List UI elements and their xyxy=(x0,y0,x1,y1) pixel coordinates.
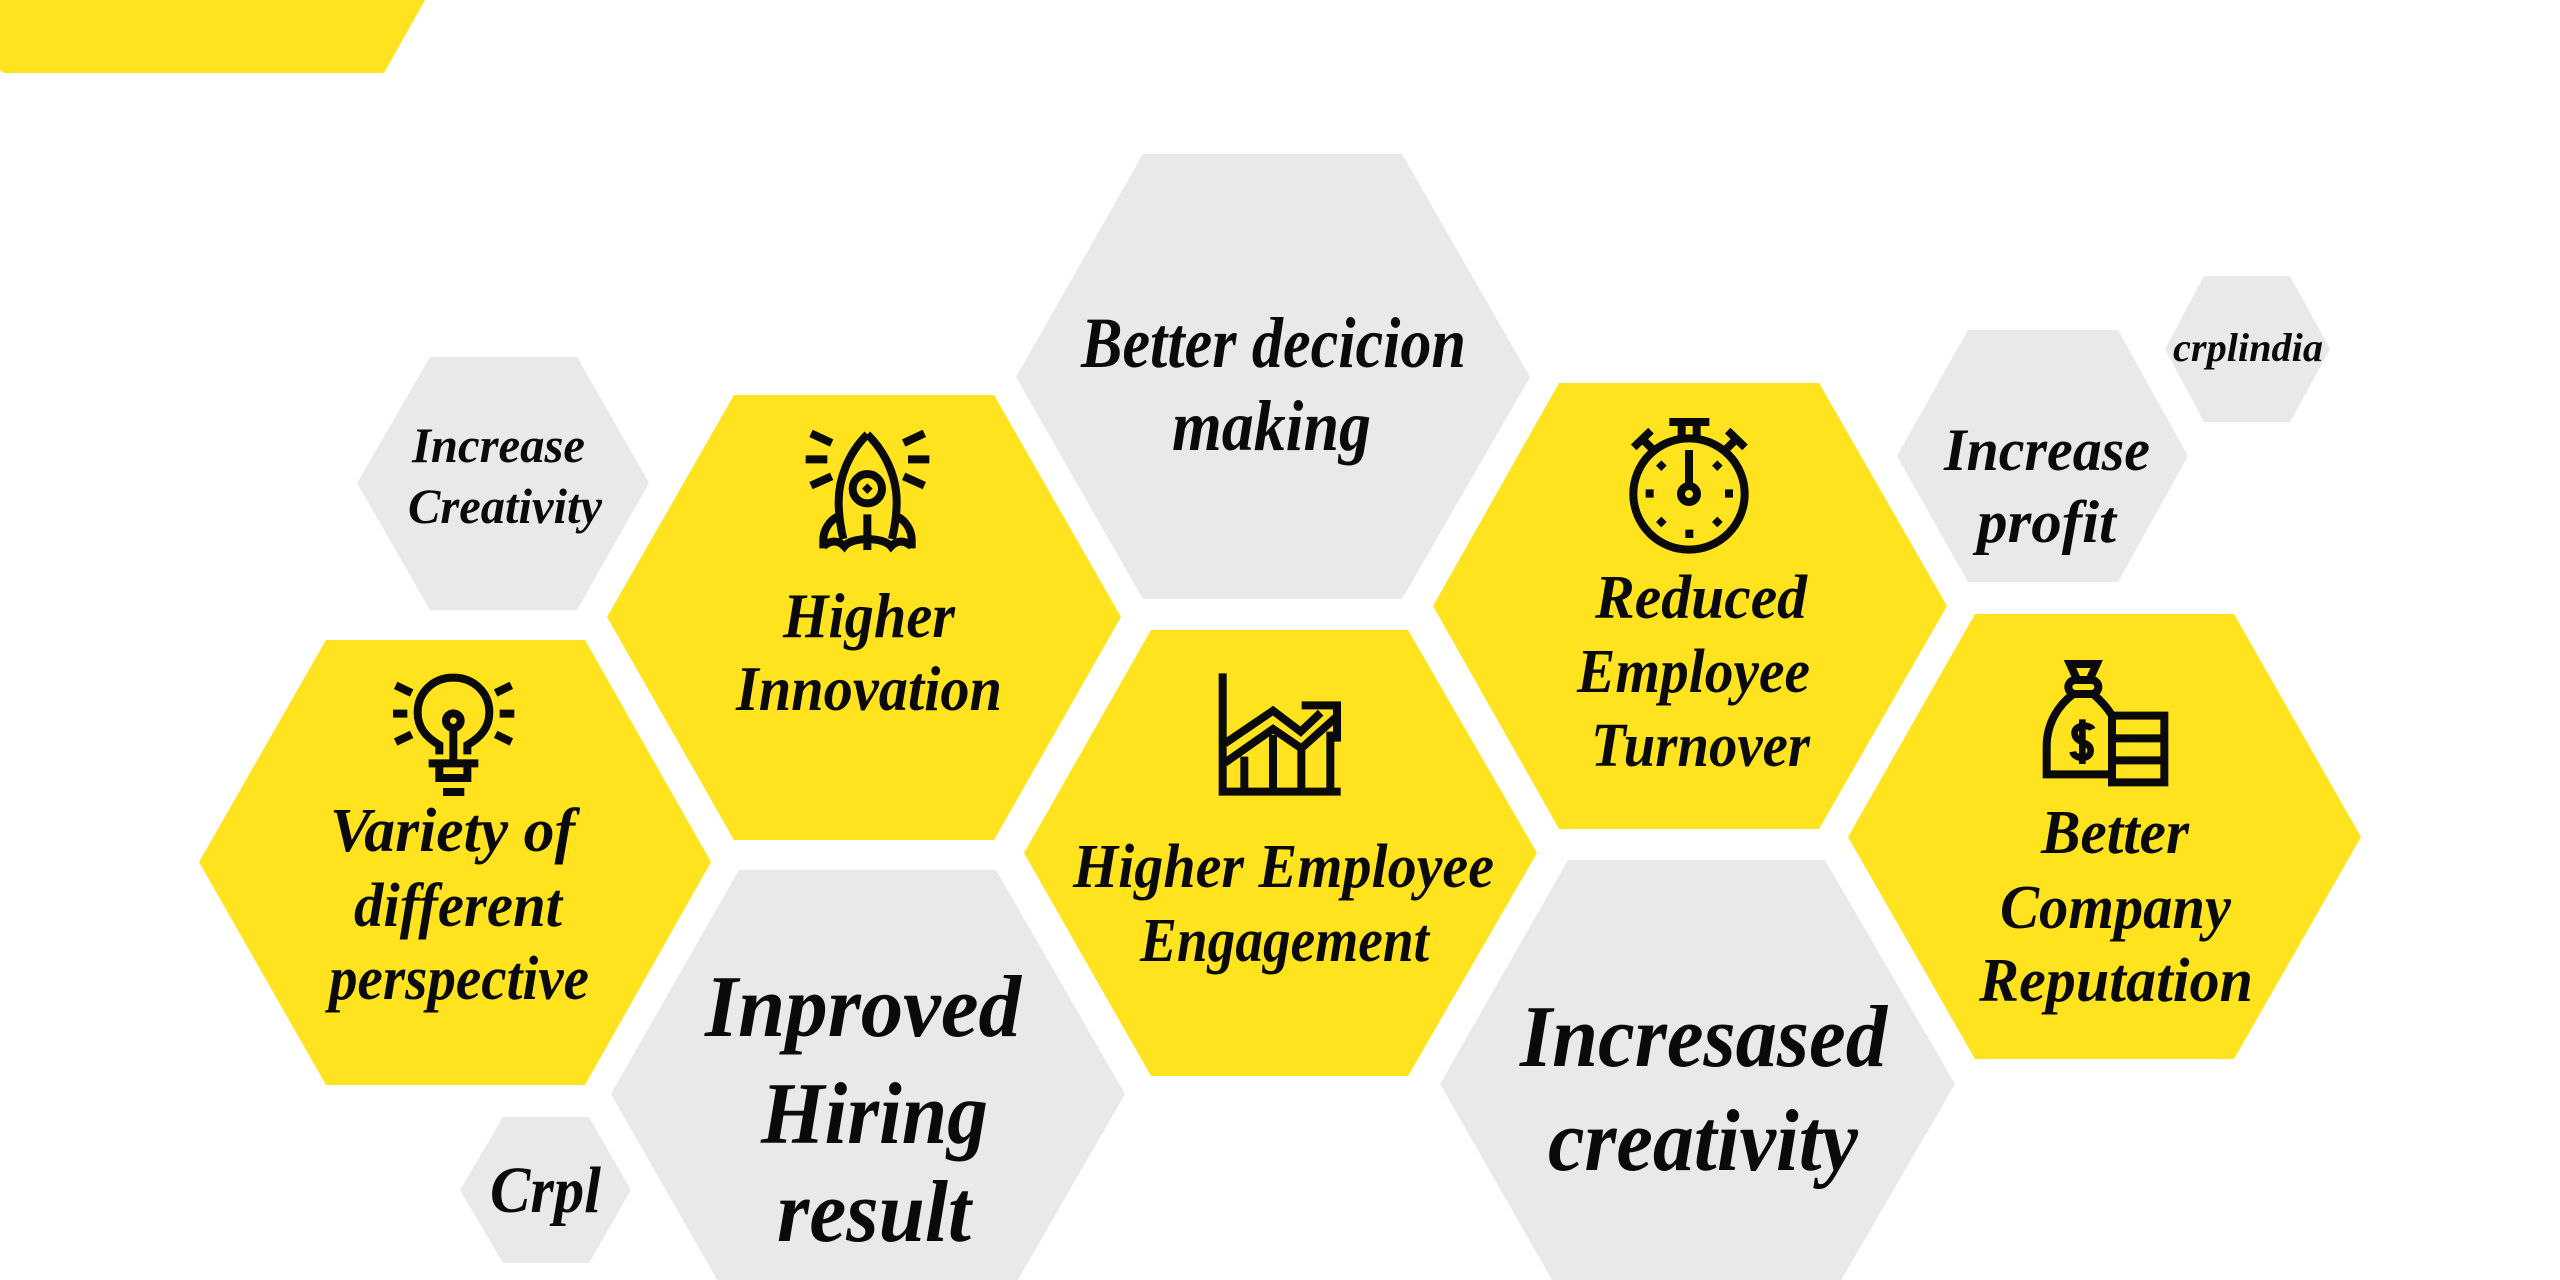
panel: Incresased creativity: creativity xyxy=(1548,1093,1859,1190)
panel: Crpl xyxy=(460,1117,631,1263)
icon: growth chart xyxy=(1223,673,1341,792)
panel: Increase Creativity: Creativity xyxy=(408,478,603,534)
panel: Crpl: Crpl xyxy=(490,1154,602,1227)
panel: Inproved Hiring result: result xyxy=(777,1164,973,1261)
panel: Variety of different perspective: different xyxy=(354,872,564,940)
panel: Variety of different perspective: Variety of xyxy=(330,797,580,865)
panel: Increase profit xyxy=(1897,330,2188,582)
panel: Variety of different perspective: perspective xyxy=(324,945,589,1013)
panel: Increase Creativity xyxy=(357,357,649,610)
panel: Higher Employee Engagement xyxy=(1024,630,1537,1076)
panel: Better decicion making: making xyxy=(1172,386,1371,466)
panel: crplindia: crplindia xyxy=(2173,325,2323,370)
panel: Increase profit: profit xyxy=(1972,489,2118,555)
panel: Higher Employee Engagement: Higher Employee xyxy=(1072,833,1494,901)
panel: Better decicion making xyxy=(1016,154,1530,599)
panel: Reduced Employee Turnover: Turnover xyxy=(1591,712,1811,780)
panel: Reduced Employee Turnover: Reduced xyxy=(1594,564,1808,632)
panel: Incresased creativity xyxy=(1440,860,1955,1280)
panel: Reduced Employee Turnover xyxy=(1433,383,1947,829)
icon: stopwatch xyxy=(1633,422,1745,550)
panel: Better Company Reputation: Company xyxy=(2000,874,2231,942)
panel: Reduced Employee Turnover: Employee xyxy=(1576,638,1810,706)
icon: light bulb xyxy=(393,678,514,792)
panel: Better Company Reputation xyxy=(1848,614,2361,1059)
icon: rocket xyxy=(806,433,929,550)
panel: Inproved Hiring result xyxy=(611,870,1125,1280)
panel: Increase Creativity: Increase xyxy=(411,417,585,473)
panel: Inproved Hiring result: Inproved xyxy=(704,959,1023,1056)
panel: Higher Innovation: Innovation xyxy=(735,653,1002,724)
panel: Higher Innovation: Higher xyxy=(782,580,956,651)
panel: Better Company Reputation: Better xyxy=(2040,799,2190,867)
panel: crplindia xyxy=(2165,276,2330,422)
panel: Incresased creativity: Incresased xyxy=(1519,989,1889,1086)
panel: Higher Employee Engagement: Engagement xyxy=(1139,907,1431,975)
panel: Increase profit: Increase xyxy=(1943,417,2150,483)
panel: Better Company Reputation: Reputation xyxy=(1978,947,2253,1015)
icon: money bag and coins xyxy=(2047,664,2164,782)
panel: Better decicion making: Better decicion xyxy=(1080,303,1466,383)
corner banner xyxy=(0,0,425,73)
panel: Higher Innovation xyxy=(607,395,1121,840)
panel: Variety of different perspective xyxy=(199,640,711,1085)
panel: Inproved Hiring result: Hiring xyxy=(760,1066,988,1163)
